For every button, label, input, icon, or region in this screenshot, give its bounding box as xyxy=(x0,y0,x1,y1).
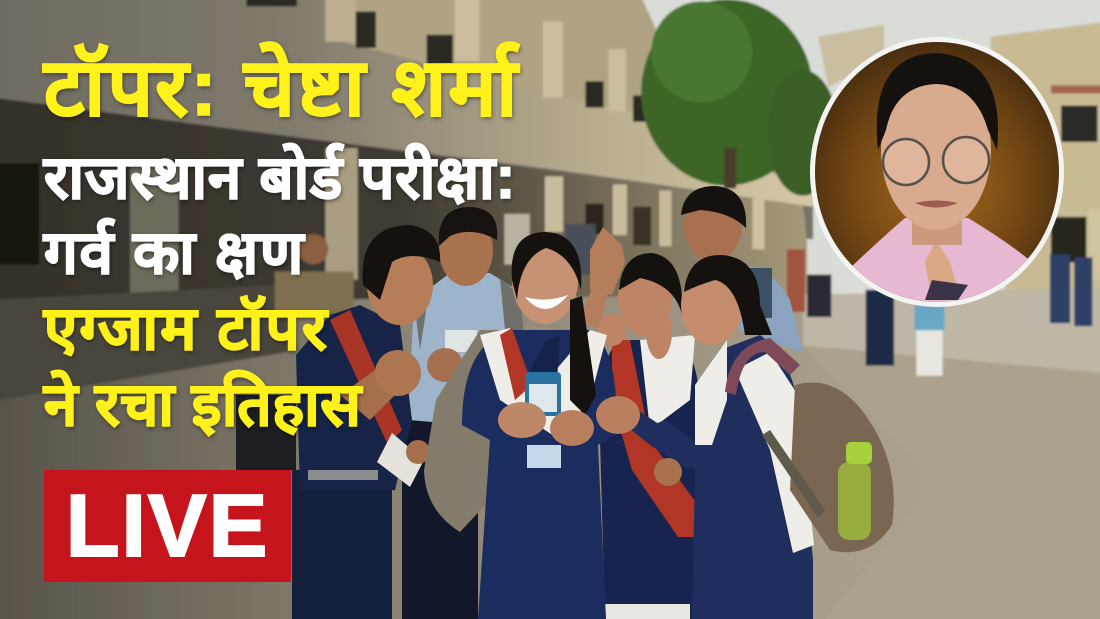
girl centre xyxy=(462,232,616,619)
inset portrait of topper xyxy=(810,37,1064,307)
student boy left xyxy=(236,225,440,619)
live badge: LIVE xyxy=(66,476,269,575)
school building left xyxy=(0,0,813,310)
student boy behind middle xyxy=(402,207,525,619)
sky xyxy=(0,0,1100,300)
courtyard ground xyxy=(0,288,1100,619)
building right xyxy=(818,22,1100,290)
girl right xyxy=(596,255,814,619)
girl behind with raised hand xyxy=(580,227,701,619)
student boy right behind xyxy=(681,186,803,353)
headline: Rajasthan board exam: राजस्थान बोर्ड परीक्षा: xyxy=(44,144,516,211)
background people xyxy=(275,214,1092,376)
headline: topper name: टॉपर: चेष्टा शर्मा xyxy=(44,43,520,132)
tree xyxy=(641,0,838,196)
backpack middle xyxy=(424,330,512,532)
headline: exam topper: एग्जाम टॉपर xyxy=(44,295,329,362)
headline: moment of pride: गर्व का क्षण xyxy=(44,219,305,286)
headline: created history: ने रचा इतिहास xyxy=(44,371,361,438)
backpack right xyxy=(725,338,894,552)
